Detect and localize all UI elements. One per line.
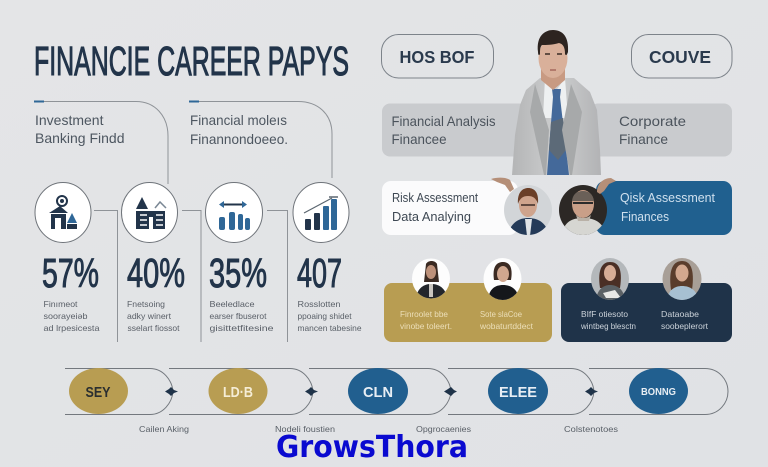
panel: risk assessment: Data Analying — [392, 210, 471, 224]
panel: investment banking heading: Banking Findd — [35, 130, 125, 146]
panel: corporate finance: Corporate — [619, 113, 686, 129]
panel: navy team: BIfF otiesoto — [581, 309, 628, 319]
stat: 35%: earser fbuserot — [210, 311, 267, 321]
timeline step: CLN: CLN — [363, 384, 393, 401]
avatar: man with long hair — [411, 258, 451, 299]
stat: 57%: ad lrpesicesta — [44, 323, 100, 333]
panel: gold team: Finroolet bbe — [400, 309, 448, 319]
panel: qisk assessment: Finances — [621, 210, 669, 224]
panel: financial models heading: Finannondoeeo. — [190, 131, 288, 147]
arrow — [585, 387, 598, 396]
watermark: GrowsThora — [276, 430, 468, 465]
avatar: woman in black — [483, 258, 523, 300]
timeline step: BONNG — [589, 368, 728, 414]
panel: qisk assessment: Qisk Assessment — [620, 191, 716, 205]
arrow — [305, 387, 318, 396]
stat: 35% — [209, 250, 274, 333]
central figure: man in suit — [512, 30, 601, 175]
stat: 40%: Fnetsoing — [127, 299, 165, 309]
arrow — [165, 387, 178, 396]
stat: 35%: gisittetfitesine — [210, 323, 274, 333]
panel: financial analysis: Financee — [392, 131, 447, 147]
stat: 407: ppoaing shidet — [298, 311, 352, 321]
panel: financial analysis — [382, 104, 527, 156]
portrait: man with glasses — [504, 185, 552, 236]
stat: 40%: adky winert — [127, 311, 172, 321]
stat: 57%: Finımeot — [44, 299, 78, 309]
stat: 407: 407 — [297, 250, 342, 296]
timeline label: Cailen Aking — [139, 424, 189, 434]
panel: financial models heading — [189, 102, 332, 178]
badge: COUVE: COUVE — [649, 47, 711, 67]
timeline step: SEY: SEY — [86, 384, 110, 401]
stat: 407: Rosslotten — [298, 299, 341, 309]
panel: navy team — [561, 283, 732, 342]
avatar: woman with brown hair — [662, 258, 702, 300]
timeline label: Nodeli foustien — [275, 424, 335, 434]
panel: navy team: soobeplerort — [661, 321, 709, 331]
stat: 57%: soorayeiəb — [44, 311, 88, 321]
panel: qisk assessment — [596, 181, 732, 235]
avatar: woman with papers — [591, 258, 631, 300]
stat: 35%: Beeledlace — [210, 299, 255, 309]
left hand — [491, 178, 514, 192]
panel: gold team: Sote slaCoe — [480, 309, 522, 319]
icon: rising bars — [293, 182, 349, 242]
panel: gold team — [384, 283, 552, 342]
timeline step: ELEE: ELEE — [499, 384, 537, 401]
panel: risk assessment — [382, 181, 518, 235]
icon: buildings — [122, 182, 178, 242]
title: FINANCIE CAREER PAPYS — [34, 38, 349, 84]
stat: 40%: sselart fiossot — [128, 323, 180, 333]
timeline label: Colstenotoes — [564, 424, 618, 434]
stat connectors — [94, 210, 288, 342]
panel: navy team: wintbeg blesctn — [580, 321, 636, 331]
panel: corporate finance: Finance — [619, 131, 668, 147]
panel: gold team: vinobe toleert. — [400, 321, 452, 331]
stat: 407: mancen tabesine — [298, 323, 362, 333]
panel: risk assessment: Risk Assessment — [392, 191, 478, 205]
icon: bars with arrows — [206, 182, 262, 242]
timeline step: SEY — [65, 368, 173, 414]
stat: 40%: 40% — [127, 250, 185, 296]
badge: HOS BOF — [382, 34, 494, 78]
badge: HOS BOF: HOS BOF — [400, 47, 475, 67]
timeline label: Opgrocaenies — [416, 424, 471, 434]
panel: financial models heading: Financial moleıs — [190, 112, 287, 128]
panel: investment banking heading — [34, 102, 168, 184]
panel: gold team: wobaturtddect — [479, 321, 534, 331]
timeline step: LD-B — [169, 368, 313, 414]
stat: 40% — [127, 250, 185, 333]
timeline step: LD-B: LD·B — [223, 384, 253, 401]
timeline step: CLN — [309, 368, 451, 414]
stat: 407 — [297, 250, 362, 333]
stat: 57%: 57% — [42, 250, 99, 296]
right hand — [597, 178, 616, 194]
stat: 35%: 35% — [209, 250, 267, 296]
portrait: older man — [559, 185, 607, 236]
timeline step: BONNG: BONNG — [641, 386, 676, 398]
panel: financial analysis: Financial Analysis — [392, 113, 496, 129]
panel: navy team: Dataoabe — [661, 309, 699, 319]
arrow — [444, 387, 457, 396]
icon: house and target — [35, 182, 91, 242]
badge: COUVE — [632, 34, 732, 78]
panel: investment banking heading: Investment — [35, 112, 104, 128]
timeline step: ELEE — [448, 368, 594, 414]
panel: corporate finance — [590, 104, 732, 156]
stat: 57% — [42, 250, 100, 333]
